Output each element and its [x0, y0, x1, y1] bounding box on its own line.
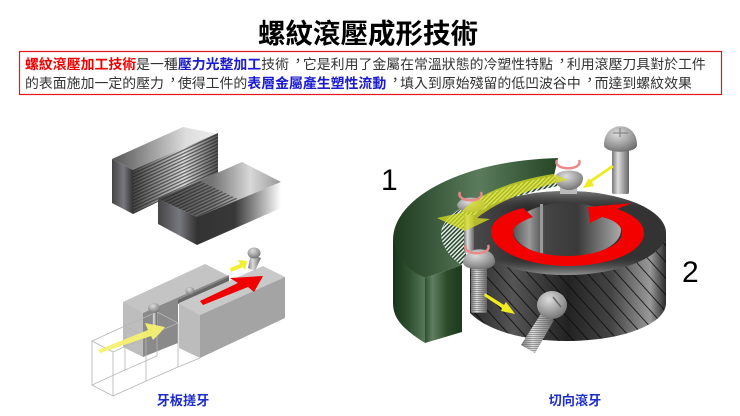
die thread hatch	[441, 176, 570, 265]
upper right screw blank	[604, 126, 637, 194]
text line 2: ，	[388, 72, 402, 88]
left fixed die	[123, 264, 229, 357]
yellow exit arrow	[484, 293, 515, 314]
front screw in progress	[463, 245, 495, 313]
panel: tangential rolling diagram	[393, 126, 666, 353]
yellow arrow feed	[98, 323, 165, 353]
text line 2: 填入到原始殘留的低凹波谷中	[400, 75, 581, 91]
upper die block	[112, 127, 218, 214]
text line 1: 利用滾壓刀具對於工件	[567, 56, 706, 72]
small yellow arrow	[230, 260, 247, 272]
text line 2: 而達到螺紋效果	[595, 75, 692, 91]
text line 1: ，	[555, 53, 569, 69]
callout: description box	[20, 52, 722, 94]
text line 1: 它是利用了金屬在常溫狀態的冷塑性特點	[303, 56, 553, 72]
text line 2: 的表面施加一定的壓力	[25, 75, 164, 91]
green die	[393, 158, 570, 343]
finished lower screw	[521, 291, 567, 353]
rotation marks top	[556, 160, 580, 168]
label: 切向滾牙: 切向滾牙	[549, 392, 601, 408]
text line 2: 使得工件的	[178, 75, 247, 91]
lower die block	[158, 162, 281, 245]
rotation marks left	[459, 192, 482, 200]
panel: thread rolling dies	[112, 127, 281, 245]
label: number 1: 1	[381, 164, 398, 197]
yellow infeed arrow	[583, 165, 614, 188]
yellow translucent feed arrow	[437, 174, 568, 231]
screw between dies	[186, 287, 194, 295]
text line 2: 表層金屬產生塑性流動	[247, 75, 386, 91]
red arrow motion	[200, 276, 263, 305]
panel: flat die rolling diagram	[92, 248, 285, 396]
label: 牙板搓牙: 牙板搓牙	[157, 392, 209, 408]
threaded ring workpiece	[466, 191, 666, 341]
label: number 2: 2	[682, 256, 699, 289]
finished screw	[248, 248, 261, 271]
wireframe work path	[92, 312, 200, 396]
text line 1: 螺紋滾壓加工技術是一種壓力光整加工技術	[25, 56, 289, 72]
text line 2: ，	[583, 72, 597, 88]
top screw blank	[555, 170, 583, 194]
text line 1: ，	[291, 53, 305, 69]
left screw blank	[457, 198, 485, 253]
text line 2: ，	[166, 72, 180, 88]
ring bore	[513, 203, 621, 257]
screw on left die	[148, 303, 160, 331]
red rotation arrow	[491, 203, 644, 266]
right moving die	[179, 266, 285, 358]
title: 螺紋滾壓成形技術	[258, 18, 478, 49]
